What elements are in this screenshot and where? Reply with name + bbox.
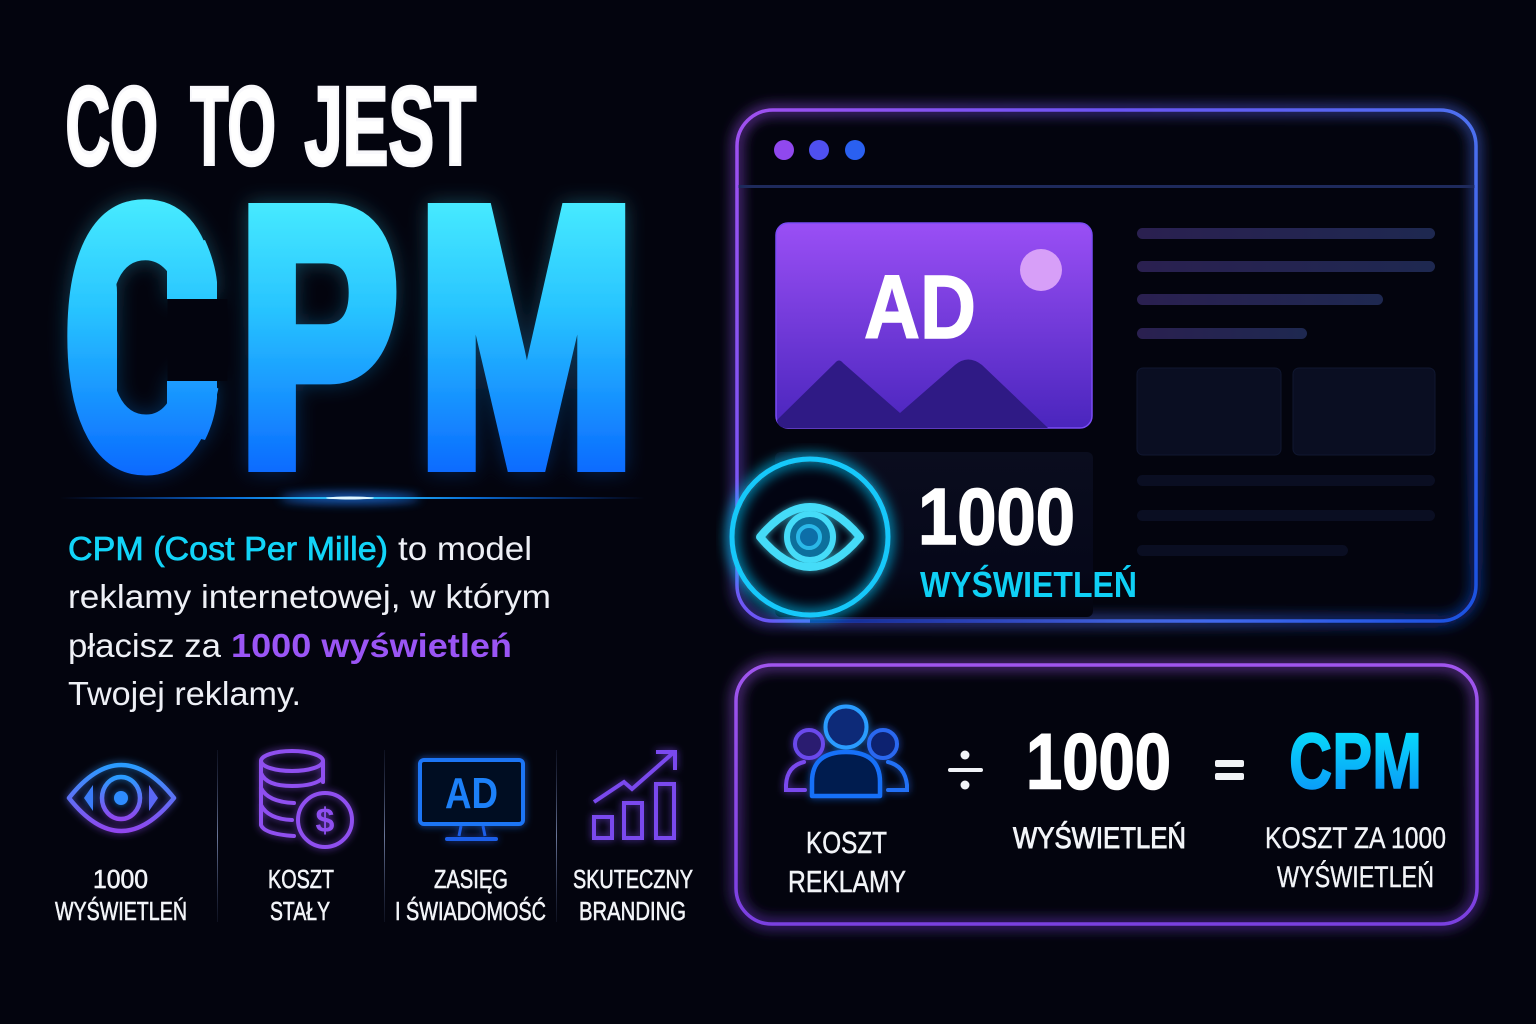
- description paragraph: to model: [398, 531, 532, 568]
- label: skuteczny branding: SKUTECZNY: [573, 864, 693, 894]
- icon: growth chart: [594, 752, 675, 838]
- operator: divide: [948, 750, 983, 790]
- label: skuteczny branding: BRANDING: [579, 896, 686, 926]
- title: CO TO JEST: [66, 64, 476, 188]
- result: CPM: WYŚWIETLEŃ: [1277, 860, 1434, 894]
- counter: 1000 wyświetleń: 1000: [918, 472, 1075, 561]
- label: zasięg i świadomość: I ŚWIADOMOŚĆ: [395, 896, 546, 926]
- result: CPM: [1265, 716, 1446, 894]
- label: 1000 wyświetleń: [55, 864, 187, 926]
- ad image: AD: [864, 258, 976, 358]
- label: skuteczny branding: [573, 864, 693, 926]
- value: 1000 wyświetleń: 1000: [1026, 716, 1171, 806]
- title: CPM: [64, 134, 636, 539]
- label: koszt stały: STAŁY: [270, 896, 330, 926]
- content placeholder lines: [1137, 228, 1435, 339]
- counter: 1000 wyświetleń: WYŚWIETLEŃ: [920, 563, 1137, 605]
- icon: monitor AD: [420, 760, 523, 841]
- operator: equals: [1215, 760, 1244, 780]
- title: CPM: C: [64, 134, 216, 539]
- label: koszt reklamy: REKLAMY: [788, 864, 906, 899]
- result: CPM: CPM: [1289, 716, 1422, 805]
- panel: formula: [736, 665, 1477, 924]
- icon: coins: $: [316, 802, 335, 840]
- description paragraph: [68, 531, 551, 713]
- window control dots: [774, 140, 865, 160]
- label: zasięg i świadomość: ZASIĘG: [434, 864, 508, 894]
- description paragraph: 1000 wyświetleń: [231, 628, 512, 665]
- badge: eye in circle: [732, 459, 888, 615]
- result: CPM: KOSZT ZA 1000: [1265, 822, 1446, 855]
- value: 1000 wyświetleń: WYŚWIETLEŃ: [1013, 821, 1186, 855]
- label: zasięg i świadomość: [395, 864, 546, 926]
- label: 1000 wyświetleń: 1000: [93, 864, 148, 894]
- placeholder panel behind counter: [775, 452, 1093, 617]
- title: CPM: M: [418, 134, 636, 539]
- counter: 1000 wyświetleń: [918, 472, 1137, 605]
- title: CPM: P: [239, 134, 398, 539]
- icon: monitor AD: AD: [445, 769, 498, 818]
- icon: eye: [69, 765, 174, 831]
- title: CO TO JEST: JEST: [304, 64, 476, 188]
- icon: coins: [261, 751, 352, 847]
- label: koszt stały: KOSZT: [268, 864, 334, 894]
- icon: people: [786, 706, 907, 796]
- description paragraph: płacisz za: [68, 628, 221, 665]
- value: 1000 wyświetleń: [1013, 716, 1186, 855]
- glowing divider: [60, 493, 645, 503]
- feature row: [55, 750, 693, 926]
- label: koszt reklamy: [788, 825, 906, 899]
- lower placeholder lines: [1137, 475, 1435, 556]
- description paragraph: Twojej reklamy.: [68, 676, 301, 713]
- description paragraph: CPM (Cost Per Mille): [68, 531, 388, 568]
- label: 1000 wyświetleń: WYŚWIETLEŃ: [55, 896, 187, 926]
- title: CO TO JEST: CO: [66, 64, 158, 188]
- description paragraph: reklamy internetowej, w którym: [68, 579, 551, 616]
- label: koszt reklamy: KOSZT: [806, 825, 887, 860]
- title: CO TO JEST: TO: [190, 64, 276, 188]
- content placeholder boxes: [1137, 368, 1435, 455]
- panel: browser window: [737, 110, 1476, 623]
- ad image: [776, 223, 1092, 428]
- label: koszt stały: [268, 864, 334, 926]
